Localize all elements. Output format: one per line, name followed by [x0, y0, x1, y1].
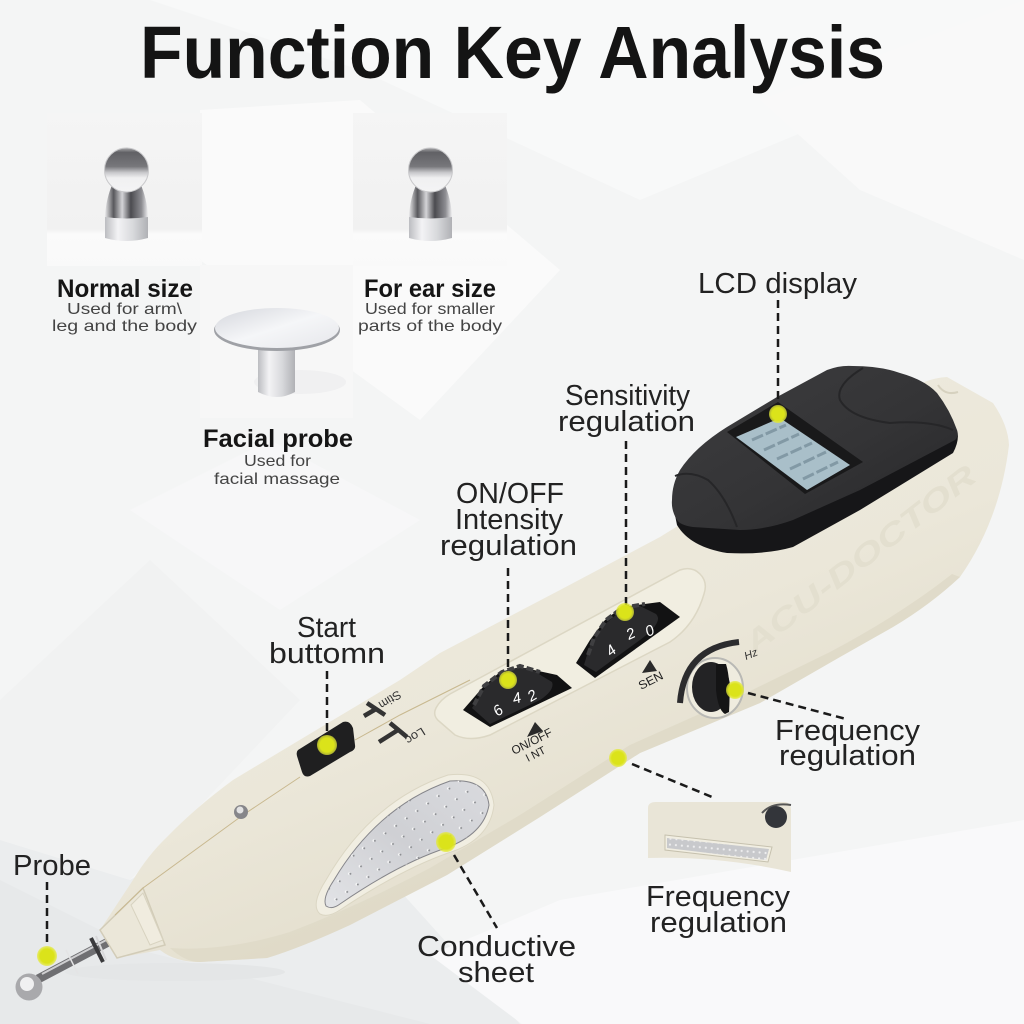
- icon: normal probe tip: [104, 148, 148, 241]
- text: facial probe: Facial probe: [203, 425, 353, 453]
- underside shade: [170, 574, 960, 962]
- label: frequency regulation (inset): [646, 881, 791, 939]
- icon: ear probe tip: [408, 148, 452, 241]
- dial: sensitivity: 4: [603, 642, 620, 660]
- tail cap line: [938, 385, 958, 393]
- label: frequency regulation (inset): Frequency: [646, 881, 791, 913]
- dial: intensity: 4: [511, 689, 523, 708]
- brand emboss: ACU-DOCTOR: [737, 459, 983, 661]
- label: start button: buttomn: [269, 638, 385, 670]
- frequency knob: [680, 642, 760, 718]
- text: facial probe: facial massage: [214, 471, 340, 488]
- label: sensitivity regulation: [558, 380, 695, 438]
- label: LCD display: LCD display: [698, 268, 858, 300]
- text: facial probe: [203, 425, 353, 488]
- label: probe: Probe: [13, 850, 91, 882]
- text: ear size: [358, 275, 502, 335]
- text: ear size: For ear size: [364, 275, 496, 303]
- inset: sensing strip detail: [648, 802, 791, 872]
- small screw: [234, 805, 248, 819]
- dial markings: I NT: [524, 744, 548, 765]
- button legends: [364, 687, 428, 747]
- dial recess: [435, 569, 705, 738]
- label: frequency regulation (knob): regulation: [779, 740, 916, 772]
- label: on/off intensity regulation: regulation: [440, 530, 577, 562]
- button legends: Loc: [403, 724, 428, 747]
- panel: ear size probe: [353, 113, 507, 266]
- panel: facial probe: [200, 265, 353, 418]
- label: sensitivity regulation: Sensitivity: [565, 380, 690, 412]
- dial markings: ON/OFF: [509, 725, 555, 758]
- dial: intensity: 2: [524, 686, 541, 706]
- text: normal size: Used for arm\: [67, 301, 183, 318]
- text: normal size: leg and the body: [52, 318, 197, 335]
- label: on/off intensity regulation: Intensity: [455, 504, 563, 536]
- text: facial probe: Used for: [244, 453, 312, 470]
- label: on/off intensity regulation: ON/OFF: [456, 478, 564, 510]
- label: conductive sheet: sheet: [458, 957, 534, 989]
- neck collar: [100, 888, 165, 958]
- dial: sensitivity: 2: [623, 624, 639, 644]
- device: acupuncture pen: [16, 366, 1009, 1000]
- label: start button: [269, 612, 385, 670]
- text: normal size: [52, 275, 197, 335]
- dial markings: [509, 660, 666, 765]
- dial markings: SEN: [636, 668, 666, 693]
- label: conductive sheet: [417, 931, 576, 989]
- label: on/off intensity regulation: [440, 478, 577, 562]
- leader lines: [47, 300, 846, 945]
- dial: intensity: 6: [490, 701, 507, 720]
- pen body: [100, 377, 1009, 962]
- icon: facial probe tip: [214, 308, 346, 397]
- seam line: [115, 680, 470, 915]
- LCD screen: [727, 402, 863, 494]
- dial: sensitivity: [576, 602, 680, 678]
- label: start button: Start: [297, 612, 356, 644]
- text: ear size: parts of the body: [358, 318, 502, 335]
- probe tip: [16, 936, 285, 1000]
- label: sensitivity regulation: regulation: [558, 406, 695, 438]
- dial: sensitivity: 0: [643, 621, 658, 641]
- conductive sheet: [316, 774, 494, 915]
- text: ear size: Used for smaller: [365, 301, 496, 318]
- title: Function Key Analysis: [140, 11, 885, 94]
- start button: [297, 722, 355, 776]
- LCD housing: [672, 366, 958, 553]
- text: normal size: Normal size: [57, 275, 193, 303]
- dial: intensity: [463, 666, 572, 727]
- frequency knob: Hz: [743, 646, 760, 663]
- label: conductive sheet: Conductive: [417, 931, 576, 963]
- label: frequency regulation (inset): regulation: [650, 907, 787, 939]
- label: frequency regulation (knob): Frequency: [775, 715, 921, 747]
- label: frequency regulation (knob): [775, 715, 921, 772]
- button legends: Stim: [376, 687, 404, 712]
- callout markers: [37, 405, 787, 966]
- panel: normal size probe: [47, 113, 202, 266]
